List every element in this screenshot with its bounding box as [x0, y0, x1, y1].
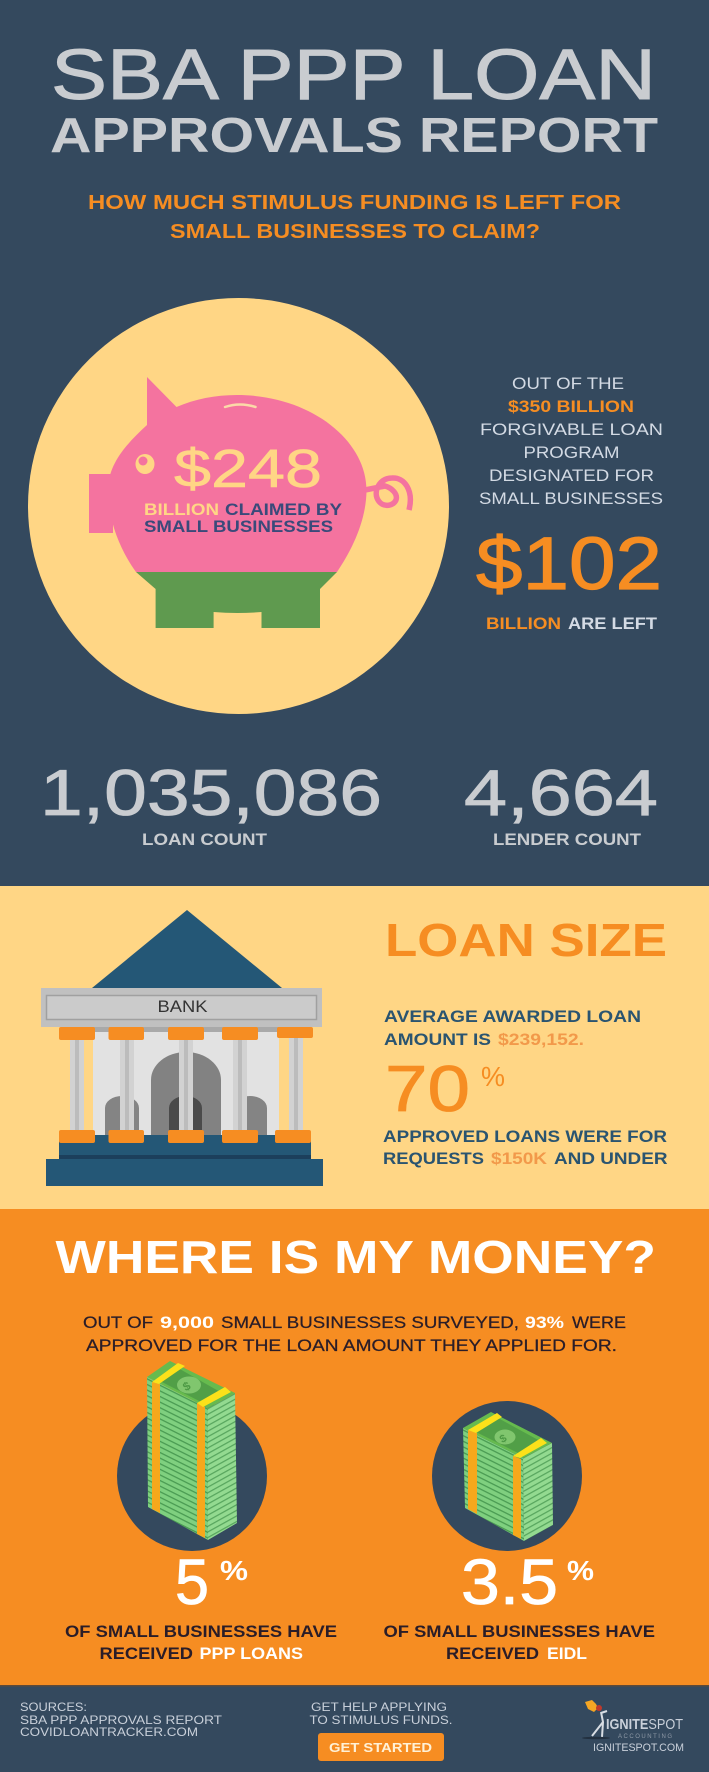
stat: 5 percent: 5 — [175, 1546, 209, 1618]
website url: IGNITESPOT.COM — [593, 1742, 684, 1754]
text block: program description: SMALL BUSINESSES — [479, 490, 663, 508]
caption: billion are left — [486, 615, 657, 633]
text block: average loan — [384, 1008, 641, 1049]
icon: short money stack in circle — [432, 1401, 582, 1551]
caption: EIDL: EIDL — [547, 1645, 587, 1663]
subtitle: HOW MUCH STIMULUS FUNDING IS LEFT FOR — [88, 191, 621, 214]
text block: program description — [479, 375, 663, 508]
stat: 70 percent — [385, 1052, 505, 1125]
text block: approved loans: AND UNDER — [554, 1150, 668, 1168]
title line 1: SBA PPP LOAN — [51, 36, 656, 115]
wordmark: accounting: ACCOUNTING — [618, 1734, 672, 1740]
text block: survey: OUT OF — [83, 1314, 153, 1332]
text block: program description: OUT OF THE — [512, 375, 624, 393]
text block: average loan: AVERAGE AWARDED LOAN — [384, 1008, 641, 1026]
text block: survey — [83, 1314, 626, 1355]
text block: program description: $350 BILLION — [508, 398, 634, 416]
text block: average loan: $239,152. — [498, 1031, 584, 1049]
text block: get help: GET HELP APPLYING — [311, 1702, 447, 1714]
stat: loan count: 1,035,086 — [40, 756, 382, 829]
text block: sources: SBA PPP APPROVALS REPORT — [20, 1715, 222, 1727]
caption: PPP loans: PPP LOANS — [200, 1645, 303, 1663]
panel: header background — [0, 0, 709, 886]
text block: program description: DESIGNATED FOR — [489, 467, 654, 485]
stat: lender count: LENDER COUNT — [493, 831, 641, 849]
caption: EIDL: OF SMALL BUSINESSES HAVE — [384, 1623, 655, 1641]
stat: 5 percent — [175, 1546, 248, 1618]
stat: lender count — [464, 756, 658, 849]
icon: piggy bank — [89, 377, 410, 628]
subtitle — [88, 191, 621, 243]
columns — [46, 1027, 323, 1186]
stat: 3.5 percent: % — [567, 1555, 594, 1586]
caption: PPP loans: RECEIVED — [100, 1645, 193, 1663]
panel: loan size background — [0, 886, 709, 1209]
piggy caption — [144, 501, 342, 536]
text block: approved loans: REQUESTS — [383, 1150, 484, 1168]
caption: EIDL — [384, 1623, 655, 1663]
caption: EIDL: RECEIVED — [446, 1645, 539, 1663]
caption: billion are left: BILLION — [486, 615, 561, 633]
heading: loan size: LOAN SIZE — [385, 914, 667, 966]
text block: sources: SOURCES: — [20, 1702, 87, 1714]
piggy caption: CLAIMED BY — [225, 501, 342, 519]
icon: tall money stack in circle — [117, 1361, 267, 1551]
text block: approved loans — [383, 1128, 668, 1168]
text block: approved loans: $150K — [491, 1150, 547, 1168]
text block: program description: PROGRAM — [524, 444, 620, 462]
panel: where is my money background — [0, 1209, 709, 1685]
text block: survey: APPROVED FOR THE LOAN AMOUNT THEY APPLIED FOR. — [86, 1337, 617, 1355]
text block: survey: SMALL BUSINESSES SURVEYED, — [221, 1314, 519, 1332]
icon: short money stack in circle: $ — [498, 1432, 509, 1446]
caption: billion are left: ARE LEFT — [568, 615, 657, 633]
title line 2: APPROVALS REPORT — [50, 109, 658, 163]
stat: 3.5 percent — [461, 1546, 594, 1618]
piggy caption: SMALL BUSINESSES — [144, 518, 333, 536]
bank sign text: BANK — [158, 997, 208, 1016]
panel: piggy bank circle — [28, 298, 449, 714]
text block: sources: COVIDLOANTRACKER.COM — [20, 1727, 198, 1739]
stat: 70 percent: 70 — [385, 1052, 470, 1125]
text block: sources — [20, 1702, 222, 1739]
amount: $102: $102 — [476, 522, 662, 605]
icon: tall money stack in circle: $ — [180, 1378, 193, 1394]
caption: PPP loans: OF SMALL BUSINESSES HAVE — [65, 1623, 337, 1641]
text block: get help — [310, 1702, 452, 1727]
icon: torch figure — [582, 1700, 610, 1739]
heading: where is my money: WHERE IS MY MONEY? — [56, 1231, 656, 1283]
text block: survey: 93% — [525, 1314, 564, 1332]
stat: 70 percent: % — [481, 1061, 505, 1092]
button: get started — [318, 1733, 444, 1761]
panel: footer background — [0, 1685, 709, 1772]
wordmark: IGNITESPOT — [606, 1716, 683, 1733]
text block: average loan: AMOUNT IS — [384, 1031, 491, 1049]
text block: approved loans: APPROVED LOANS WERE FOR — [383, 1128, 667, 1146]
text block: program description: FORGIVABLE LOAN — [480, 421, 663, 439]
button: get started: GET STARTED — [329, 1740, 432, 1755]
caption: PPP loans — [65, 1623, 337, 1663]
text block: survey: 9,000 — [160, 1314, 214, 1332]
stat: loan count — [40, 756, 382, 849]
subtitle: SMALL BUSINESSES TO CLAIM? — [170, 220, 540, 243]
amount: $248: $248 — [174, 439, 322, 499]
stat: 5 percent: % — [220, 1555, 248, 1586]
icon: bank building — [41, 910, 323, 1186]
stat: 3.5 percent: 3.5 — [461, 1546, 558, 1618]
stat: lender count: 4,664 — [464, 756, 658, 829]
stat: loan count: LOAN COUNT — [142, 831, 267, 849]
piggy caption: BILLION — [144, 501, 219, 519]
text block: get help: TO STIMULUS FUNDS. — [310, 1715, 452, 1727]
text block: survey: WERE — [572, 1314, 626, 1332]
logo: ignite spot — [582, 1700, 684, 1754]
